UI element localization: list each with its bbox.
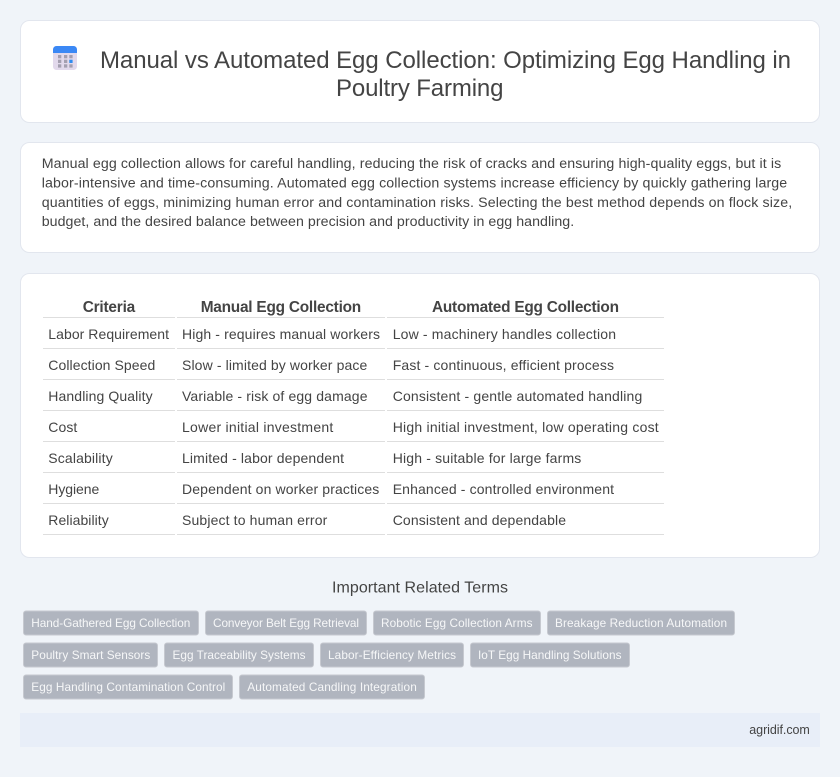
footer: agridif.com [749, 723, 810, 737]
table header: Criteria [83, 299, 136, 316]
row: reliability [48, 512, 566, 528]
panel: introduction text: Manual egg collection allows for careful handling, reducing the risk of cracks and ensuring high-quality eggs, but it is [42, 156, 781, 172]
title [100, 47, 791, 102]
heading: related terms: Important Related Terms [332, 580, 508, 596]
row: reliability: Subject to human error [182, 512, 328, 528]
row: hygiene: Hygiene [48, 481, 100, 497]
tag: Breakage Reduction Automation [555, 616, 727, 630]
table header: Manual Egg Collection [201, 299, 361, 316]
row: collection speed: Slow - limited by worker pace [182, 357, 368, 373]
row: collection speed [48, 357, 614, 373]
row: handling quality: Variable - risk of egg damage [182, 388, 368, 404]
row: scalability [48, 450, 581, 466]
row: reliability: Consistent and dependable [393, 512, 566, 528]
row: hygiene [48, 481, 614, 497]
row: scalability: Scalability [48, 450, 113, 466]
tag: IoT Egg Handling Solutions [478, 648, 622, 662]
table header: Automated Egg Collection [432, 299, 619, 316]
tag [164, 643, 314, 667]
panel: comparison table [20, 274, 820, 558]
tag: Egg Traceability Systems [172, 648, 306, 662]
panel: title header [20, 20, 820, 122]
footer [20, 713, 820, 747]
tag [206, 611, 366, 635]
tag: Automated Candling Integration [247, 680, 417, 694]
row: labor requirement: Low - machinery handles collection [393, 326, 616, 342]
tag [320, 643, 464, 667]
row: labor requirement [48, 326, 616, 342]
tag: Robotic Egg Collection Arms [381, 616, 533, 630]
row: labor requirement: Labor Requirement [48, 326, 169, 342]
tag [240, 675, 424, 699]
row: cost [48, 419, 659, 435]
tag list: related terms [24, 611, 734, 699]
tag: Labor-Efficiency Metrics [328, 648, 456, 662]
table header [83, 299, 619, 316]
row: hygiene: Dependent on worker practices [182, 481, 379, 497]
panel: introduction text: budget, and the desired balance between precision and productivity in egg handling. [42, 214, 574, 230]
row: labor requirement: High - requires manual workers [182, 326, 380, 342]
row: cost: Lower initial investment [182, 419, 333, 435]
tag: Egg Handling Contamination Control [31, 680, 225, 694]
row: scalability: Limited - labor dependent [182, 450, 344, 466]
row: handling quality: Handling Quality [48, 388, 153, 404]
row: cost: High initial investment, low operating cost [393, 419, 659, 435]
title: Poultry Farming [336, 75, 504, 102]
panel: introduction text [20, 142, 820, 252]
panel: introduction text: labor-intensive and time-consuming. Automated egg collection systems increase efficiency by quickly gathering large [42, 176, 787, 192]
panel: introduction text: quantities of eggs, minimizing human error and contamination risks. Selecting the best method depends on flock size, [42, 195, 792, 211]
tag: Hand-Gathered Egg Collection [31, 616, 190, 630]
tag [548, 611, 734, 635]
tag [24, 611, 198, 635]
tag [374, 611, 540, 635]
tag [24, 675, 232, 699]
title: Manual vs Automated Egg Collection: Optimizing Egg Handling in [100, 47, 791, 74]
row: cost: Cost [48, 419, 77, 435]
row: handling quality [48, 388, 642, 404]
row: reliability: Reliability [48, 512, 109, 528]
row: hygiene: Enhanced - controlled environment [393, 481, 614, 497]
tag: Poultry Smart Sensors [31, 648, 150, 662]
tag: Conveyor Belt Egg Retrieval [213, 616, 359, 630]
icon: calendar [53, 46, 77, 70]
row: handling quality: Consistent - gentle automated handling [393, 388, 642, 404]
tag [24, 643, 158, 667]
row: collection speed: Collection Speed [48, 357, 155, 373]
row: scalability: High - suitable for large farms [393, 450, 581, 466]
tag [470, 643, 630, 667]
row: collection speed: Fast - continuous, efficient process [393, 357, 614, 373]
